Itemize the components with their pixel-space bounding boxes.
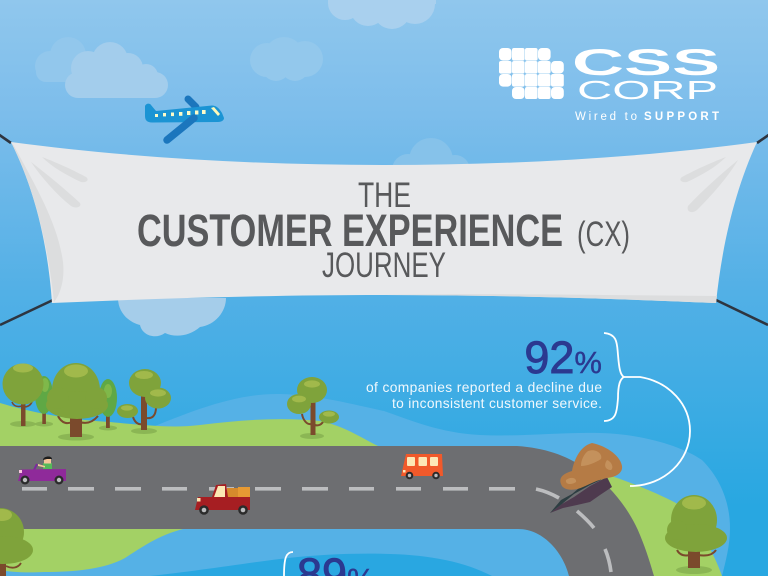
green hill: right curve — [600, 472, 722, 576]
tree: far left — [2, 364, 44, 427]
logo: CSS Corp: CORP — [577, 75, 718, 105]
logo tagline: Wired to — [575, 111, 637, 123]
title: THE — [358, 176, 411, 215]
logo: CSS Corp — [499, 42, 720, 123]
banner — [11, 142, 757, 303]
cloud: behind banner — [392, 138, 470, 186]
logo: CSS Corp: SUPPORT — [644, 111, 719, 123]
green hill: lower left — [0, 529, 183, 572]
title — [137, 176, 630, 285]
brace — [284, 552, 293, 576]
cloud: below banner — [118, 298, 226, 336]
orange bus — [401, 454, 443, 479]
tree: branching right — [287, 377, 339, 439]
tree: large — [46, 363, 108, 440]
purple car with driver — [18, 456, 66, 484]
tree: narrow green right — [99, 379, 117, 430]
tree: lower left — [0, 508, 33, 576]
tree: lower right — [665, 495, 727, 574]
airplane icon — [145, 99, 224, 140]
boulder — [560, 443, 622, 490]
brace connector to boulder — [604, 333, 690, 486]
logo grid mark — [499, 48, 564, 99]
stat figure: 92% — [524, 332, 602, 383]
callout: 92% stat — [366, 332, 602, 411]
title: CUSTOMER EXPERIENCE — [137, 205, 563, 256]
darker water wave: bottom — [150, 554, 492, 576]
title: (CX) — [577, 215, 630, 254]
cloud: centre small — [250, 37, 323, 81]
title: JOURNEY — [322, 246, 446, 285]
banner ropes — [0, 134, 768, 325]
cloud: front left — [65, 42, 168, 98]
tree: narrow green left — [35, 376, 53, 426]
callout: 89% stat (cropped) — [284, 549, 375, 576]
road curved dashes — [536, 489, 611, 572]
road lane dashes — [22, 487, 515, 491]
cloud: top centre — [328, 0, 436, 29]
rockfall crack — [550, 477, 612, 513]
stat description: of companies reported a decline due — [366, 380, 602, 395]
cloud: back left — [35, 37, 96, 82]
light blue background hills — [0, 394, 730, 576]
tree: branching centre — [117, 369, 171, 434]
callout: 92% stat: to inconsistent customer service. — [392, 396, 602, 411]
logo wordmark: CSS — [572, 42, 720, 83]
red pickup truck with cargo — [195, 484, 250, 515]
green hill: upper left — [0, 403, 378, 446]
road — [0, 446, 654, 576]
